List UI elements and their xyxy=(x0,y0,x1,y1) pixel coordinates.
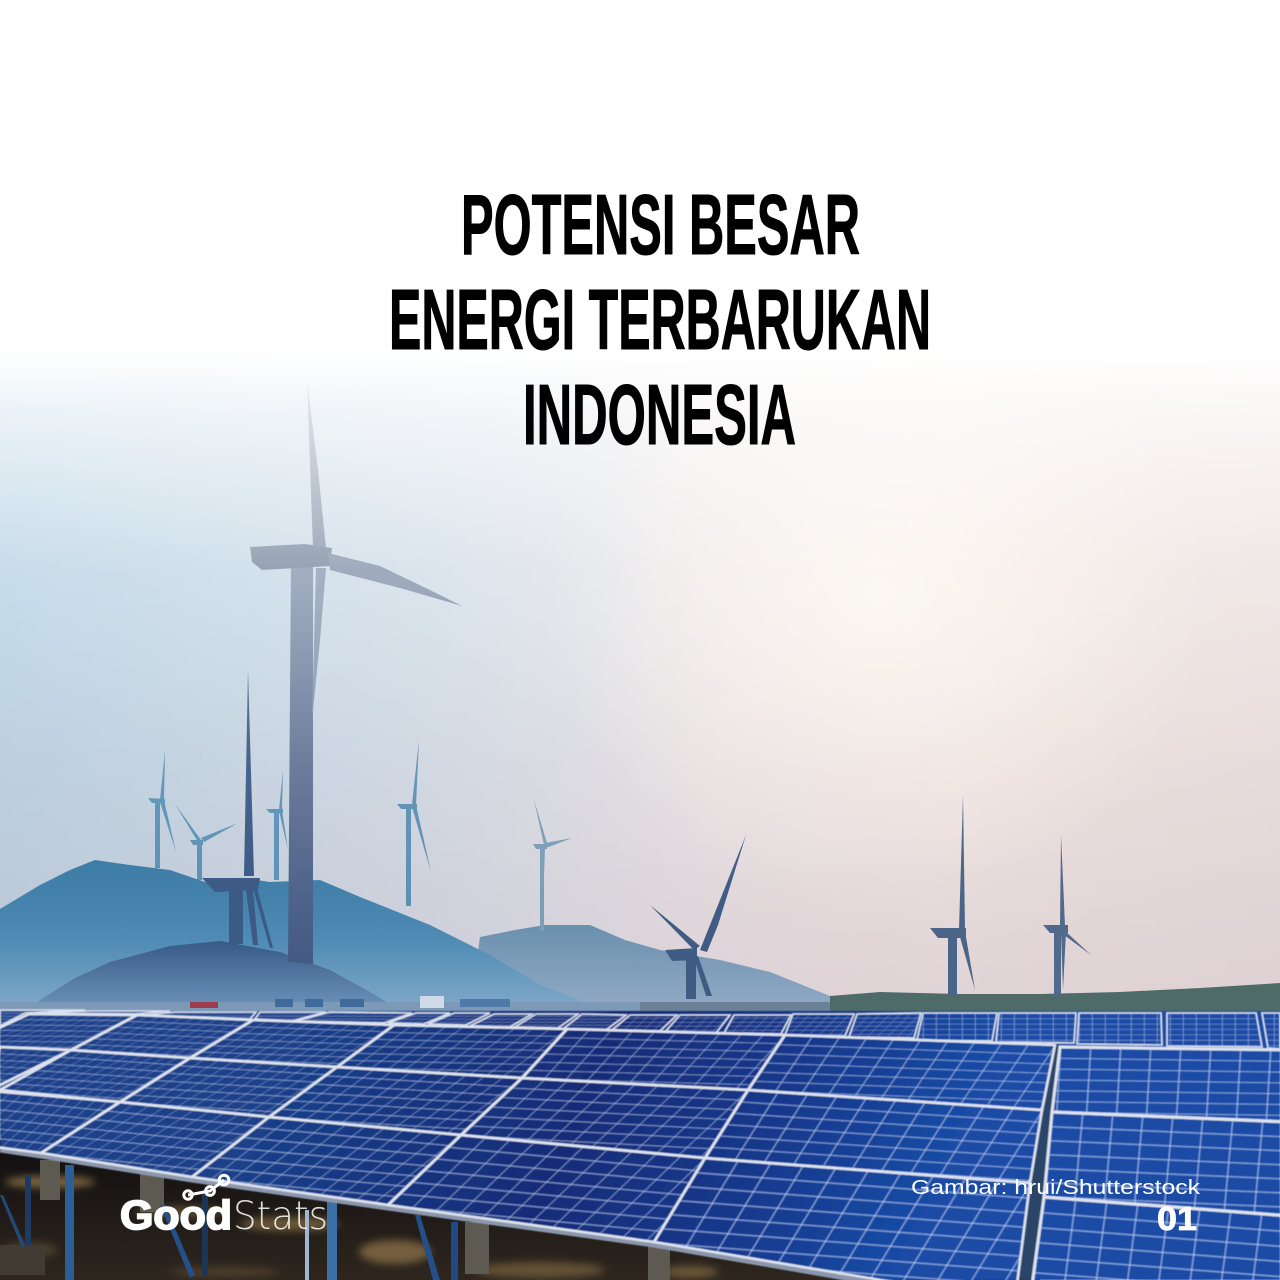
turbine right one xyxy=(930,795,975,996)
title: POTENSI BESAR xyxy=(461,178,860,273)
big wind turbine xyxy=(250,380,462,964)
logo line chart icon xyxy=(184,1175,229,1199)
ground under panels xyxy=(0,1140,1040,1280)
blade right xyxy=(328,553,462,606)
sky background xyxy=(0,0,1280,1020)
turbine centre foreground xyxy=(650,835,746,999)
distant mountains right xyxy=(470,925,860,1010)
back row panels xyxy=(0,1010,1280,1049)
turbine far left xyxy=(148,750,176,868)
turbine centre left xyxy=(397,740,431,906)
nacelle xyxy=(250,544,332,570)
tree line right xyxy=(830,983,1280,1014)
solar panel array xyxy=(0,1010,1280,1280)
GoodStats logo: Good xyxy=(120,1192,232,1238)
left mountain range xyxy=(0,860,600,1010)
blade down xyxy=(312,568,326,720)
mid wind turbine xyxy=(202,670,273,948)
small wind turbines behind mountains xyxy=(148,740,572,931)
main left array panels xyxy=(0,1014,1055,1280)
blade up xyxy=(307,380,326,548)
title xyxy=(389,178,931,463)
turbine behind big tower xyxy=(266,770,288,880)
front hill xyxy=(30,941,400,1010)
panel frame underside xyxy=(0,1150,880,1280)
turbine centre xyxy=(533,800,572,931)
gap between array sections xyxy=(1016,1045,1062,1280)
turbine right two xyxy=(1043,835,1091,996)
array base fill xyxy=(0,1011,1280,1280)
turbine second left xyxy=(175,804,238,880)
page number: 01 xyxy=(1157,1200,1197,1237)
right array panels xyxy=(1030,1047,1280,1280)
concrete footings xyxy=(0,1160,670,1280)
GoodStats logo: Stats xyxy=(233,1194,328,1239)
white fade over top of scene xyxy=(0,0,1280,1020)
title: INDONESIA xyxy=(523,368,796,463)
tower xyxy=(288,560,313,964)
support posts xyxy=(0,1165,458,1280)
image credit: Gambar: hrui/Shutterstock xyxy=(911,1177,1201,1199)
GoodStats logo xyxy=(120,1175,328,1239)
solar farm distant buildings xyxy=(0,996,830,1012)
